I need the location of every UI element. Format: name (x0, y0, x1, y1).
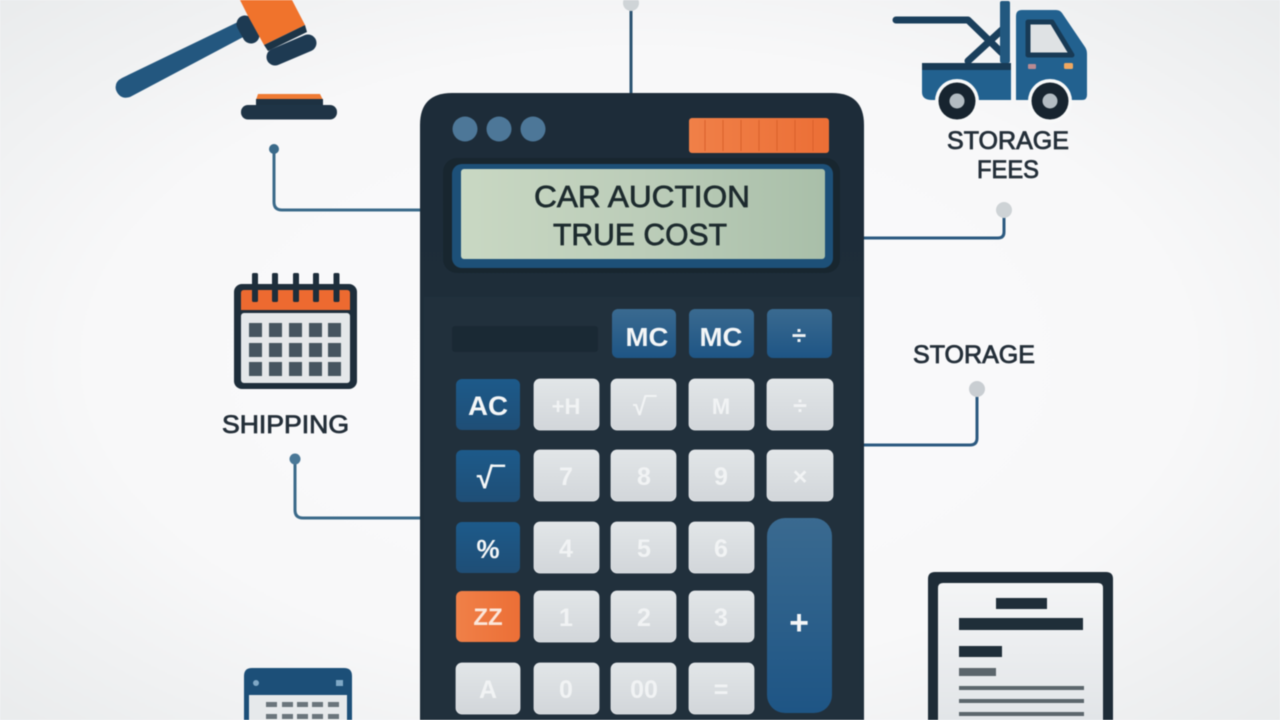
truck front wheel (1028, 79, 1072, 123)
keys: top row: ÷ (792, 320, 806, 350)
icon: calendar (234, 273, 357, 389)
label: storage fees: STORAGE (947, 127, 1069, 155)
gavel face (275, 43, 308, 57)
key labels: √‾ (633, 393, 657, 421)
keys: blue function column: √‾ (477, 462, 505, 495)
display: TRUE COST (553, 217, 727, 252)
key labels: 1 (559, 604, 573, 632)
icon: gavel (116, 0, 308, 98)
truck window (1028, 22, 1072, 55)
keys: blue function column (456, 379, 520, 573)
display (443, 158, 840, 273)
tablet cells (266, 702, 339, 719)
key labels: 4 (559, 535, 573, 563)
truck cab (1016, 10, 1087, 100)
label: storage fees (947, 127, 1069, 184)
keys: light grey keypad (456, 379, 833, 714)
solar panel (689, 118, 829, 153)
document headings (959, 598, 1083, 657)
icon: invoice document (928, 572, 1113, 720)
key labels: × (793, 463, 807, 491)
label: storage fees: FEES (977, 156, 1039, 184)
key labels: 6 (714, 535, 728, 563)
calendar grid (249, 323, 341, 376)
keys: top row: MC (700, 322, 743, 352)
key: orange (456, 591, 520, 642)
label: shipping: SHIPPING (222, 411, 349, 439)
connector: shipping (290, 454, 422, 518)
gavel head (240, 0, 305, 45)
document text lines (959, 668, 1084, 716)
key labels: 0 (559, 676, 573, 704)
connector: gavel (269, 144, 422, 210)
calculator (420, 93, 864, 720)
icon: tablet (244, 668, 352, 720)
tablet header icons (253, 680, 259, 686)
truck rear wheel (935, 79, 979, 123)
tablet frame (244, 668, 352, 720)
calculator body (420, 93, 864, 720)
connector: storage (862, 381, 985, 445)
key labels: 00 (630, 676, 658, 704)
key labels: 9 (714, 463, 728, 491)
key labels: 2 (637, 604, 651, 632)
key: tall plus: + (789, 604, 809, 642)
calendar header (241, 290, 350, 310)
truck boom (896, 20, 1004, 61)
key labels: +H (552, 394, 580, 419)
label: storage: STORAGE (913, 341, 1035, 369)
solar dots (452, 116, 546, 142)
keys: blue function column: AC (468, 391, 508, 421)
keys: top row: MC (626, 322, 669, 352)
key: orange: ZZ (473, 604, 503, 631)
icon: sound block (241, 94, 337, 120)
key labels: 7 (559, 463, 573, 491)
key labels: ÷ (793, 392, 807, 420)
gavel handle (116, 21, 247, 98)
icon: tow truck (896, 1, 1087, 123)
connector: top (623, 0, 639, 93)
keys: blue function column: % (476, 534, 500, 564)
gavel collar (245, 24, 251, 35)
memory slot (452, 326, 598, 352)
tablet screen (249, 695, 347, 720)
calendar rings (252, 273, 340, 302)
key: tall plus (767, 518, 832, 713)
key labels: 8 (637, 463, 651, 491)
calendar page (241, 313, 350, 383)
calendar frame (234, 284, 357, 389)
key labels: 5 (637, 535, 651, 563)
truck lights (1028, 64, 1036, 69)
gavel strip (264, 25, 307, 51)
keys: top row (612, 309, 832, 358)
key labels: M (712, 394, 730, 419)
key labels (479, 392, 807, 704)
keypad divider (424, 297, 860, 720)
truck bed (922, 63, 1011, 100)
key labels: A (479, 676, 497, 704)
connector: storage fees (862, 202, 1012, 238)
document frame (928, 572, 1113, 720)
key labels: 3 (714, 604, 728, 632)
truck post (1000, 1, 1010, 63)
key labels: = (714, 676, 728, 704)
display text: CAR AUCTION (534, 179, 750, 214)
document page (938, 583, 1103, 720)
